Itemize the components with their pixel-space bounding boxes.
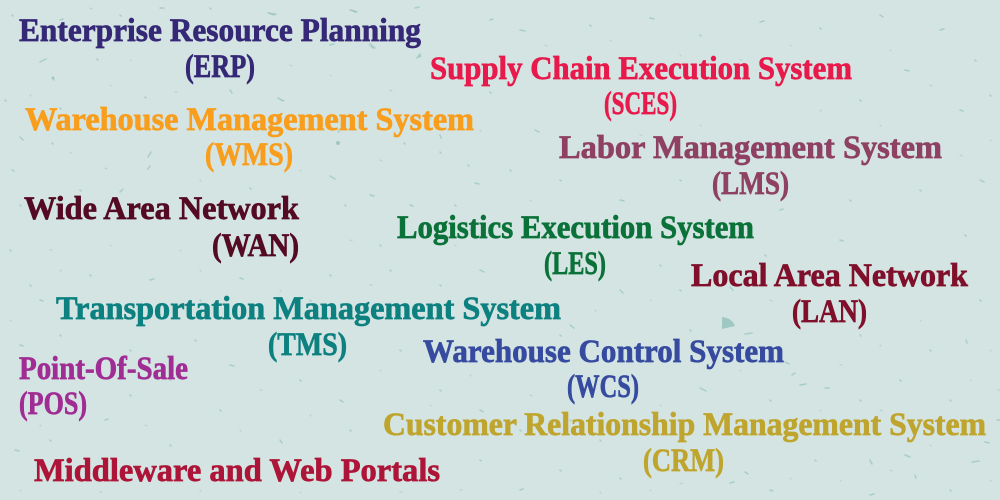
label: Local Area Network (LAN): Local Area Network — [691, 258, 969, 294]
label: Warehouse Control System (WCS) — [423, 334, 784, 405]
label: Middleware and Web Portals: Middleware and Web Portals — [34, 453, 440, 489]
label: Point-Of-Sale (POS): (POS) — [19, 386, 87, 422]
label: Logistics Execution System (LES): Logistics Execution System — [397, 210, 754, 246]
label: Transportation Management System (TMS): Transportation Management System — [56, 291, 561, 327]
label: Customer Relationship Management System (CRM) — [383, 407, 986, 479]
label: Logistics Execution System (LES) — [397, 210, 754, 282]
label: Warehouse Management System (WMS) — [25, 102, 474, 173]
label: Customer Relationship Management System (CRM): (CRM) — [643, 443, 724, 479]
label: Logistics Execution System (LES): (LES) — [544, 246, 606, 282]
label: Point-Of-Sale (POS): Point-Of-Sale — [19, 351, 188, 387]
label: Supply Chain Execution System (SCES): Supply Chain Execution System — [430, 51, 852, 87]
label: Transportation Management System (TMS) — [56, 291, 561, 363]
label: Wide Area Network (WAN) — [24, 191, 300, 264]
label: Enterprise Resource Planning (ERP): (ERP) — [185, 49, 255, 85]
label: Local Area Network (LAN): (LAN) — [792, 294, 867, 330]
label: Warehouse Control System (WCS): (WCS) — [567, 369, 639, 405]
label: Transportation Management System (TMS): (TMS) — [268, 327, 347, 363]
label: Wide Area Network (WAN): Wide Area Network — [24, 191, 300, 227]
label: Labor Management System (LMS): (LMS) — [712, 166, 789, 202]
label: Warehouse Control System (WCS): Warehouse Control System — [423, 334, 784, 370]
label: Supply Chain Execution System (SCES): (SCES) — [604, 86, 677, 122]
label: Enterprise Resource Planning (ERP) — [19, 13, 421, 85]
label: Local Area Network (LAN) — [691, 258, 969, 330]
label: Customer Relationship Management System (CRM): Customer Relationship Management System — [383, 407, 986, 443]
label: Enterprise Resource Planning (ERP): Enterprise Resource Planning — [19, 13, 421, 49]
label: Labor Management System (LMS): Labor Management System — [559, 130, 942, 166]
label: Point-Of-Sale (POS) — [19, 351, 188, 422]
label: Supply Chain Execution System (SCES) — [430, 51, 852, 122]
label: Wide Area Network (WAN): (WAN) — [212, 228, 299, 264]
label: Warehouse Management System (WMS): Warehouse Management System — [25, 102, 474, 138]
label: Labor Management System (LMS) — [559, 130, 942, 202]
label: Warehouse Management System (WMS): (WMS) — [205, 137, 293, 173]
